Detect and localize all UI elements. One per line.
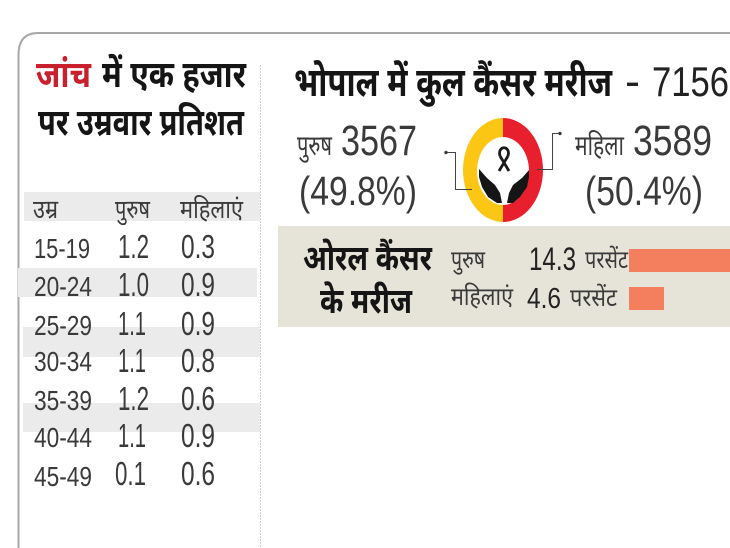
table stripes — [18, 192, 260, 432]
left heading: में एक हजार — [102, 53, 247, 95]
female values: 0.9 — [181, 266, 215, 303]
female values: 0.9 — [181, 417, 215, 454]
age labels — [34, 233, 92, 492]
male row: 14.3 — [529, 241, 576, 277]
main heading: भोपाल में कुल कैंसर मरीज — [294, 60, 613, 107]
male values: 1.1 — [118, 305, 146, 342]
female values: 0.3 — [181, 228, 215, 265]
age labels: 25-29 — [34, 310, 92, 341]
female total: (50.4%) — [585, 168, 703, 214]
table header: पुरुष — [115, 194, 151, 225]
table header: उम्र — [33, 194, 58, 224]
male row: पुरुष — [451, 246, 485, 275]
left heading: जांच — [36, 54, 92, 95]
male values — [115, 228, 149, 492]
female row: परसेंट — [570, 283, 617, 312]
female values: 0.6 — [181, 380, 215, 417]
age table — [18, 192, 260, 492]
male total — [297, 117, 417, 214]
female values: 0.6 — [181, 455, 215, 492]
female values: 0.9 — [181, 305, 215, 342]
male values: 1.2 — [118, 228, 149, 265]
panel heading: के मरीज — [320, 281, 413, 321]
male row: परसेंट — [585, 245, 628, 274]
female values — [181, 228, 215, 492]
age labels: 35-39 — [34, 385, 92, 416]
main heading: - — [625, 57, 640, 106]
column divider — [260, 65, 262, 548]
female row: 4.6 — [527, 283, 561, 315]
age labels: 20-24 — [34, 271, 92, 302]
age labels: 45-49 — [34, 461, 92, 492]
male values: 0.1 — [115, 455, 146, 492]
panel heading — [303, 238, 432, 321]
male row — [451, 241, 730, 277]
icon: ribbon — [499, 148, 509, 171]
male values: 1.2 — [118, 380, 149, 417]
male total: पुरुष — [297, 130, 333, 163]
leader lines — [445, 132, 561, 190]
left heading — [36, 53, 247, 143]
female total — [575, 117, 712, 214]
left heading: पर उम्रवार प्रतिशत — [38, 102, 245, 143]
female row: महिलाएं — [451, 282, 514, 311]
female total: महिला — [575, 129, 625, 161]
male values: 1.0 — [118, 266, 149, 303]
female values: 0.8 — [181, 342, 215, 379]
male total: 3567 — [341, 117, 417, 165]
male values: 1.1 — [118, 417, 146, 454]
panel heading: ओरल कैंसर — [303, 238, 432, 278]
icon: hands — [479, 169, 529, 203]
table header: महिलाएं — [180, 194, 244, 224]
male total: (49.8%) — [299, 168, 417, 214]
female row — [451, 282, 664, 315]
age labels: 40-44 — [34, 422, 92, 453]
table header — [33, 194, 244, 225]
female total: 3589 — [633, 117, 712, 165]
icon: cancer donut with ribbon and hands — [463, 118, 543, 222]
age labels: 15-19 — [34, 233, 90, 264]
panel: oral cancer patients — [278, 226, 730, 327]
male values: 1.1 — [118, 342, 146, 379]
age labels: 30-34 — [34, 346, 92, 377]
